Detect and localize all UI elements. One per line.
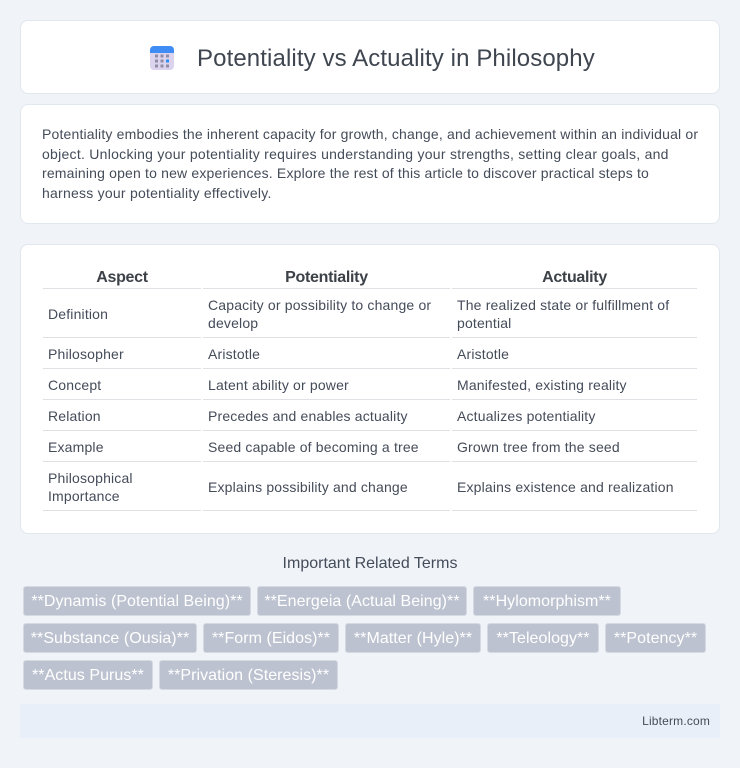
icon: calendar xyxy=(150,46,174,70)
panel: comparison table: Seed capable of becoming a tree xyxy=(208,439,419,455)
related term tags: **Form (Eidos)** xyxy=(212,630,330,647)
panel: comparison table: Grown tree from the seed xyxy=(457,439,620,455)
text block: introduction: object. Unlocking your potentiality requires understanding your strengths, setting clear goals, and xyxy=(42,146,669,162)
related term tags: **Privation (Steresis)** xyxy=(168,667,329,684)
related term tags: **Potency** xyxy=(614,630,697,647)
panel: comparison table: Precedes and enables actuality xyxy=(208,408,408,424)
row: relation: Relation xyxy=(48,408,101,424)
row: philosophical importance xyxy=(48,470,133,504)
panel: comparison table: The realized state or fulfillment of xyxy=(457,297,669,313)
row: philosophical importance: Philosophical xyxy=(48,470,133,486)
table headers: Actuality xyxy=(542,269,607,286)
panel: comparison table: Capacity or possibility to change or xyxy=(208,297,431,313)
text block: introduction xyxy=(42,126,698,201)
text block: introduction: Potentiality embodies the inherent capacity for growth, change, and achievement within an individual or xyxy=(42,126,698,142)
panel: comparison table: Aristotle xyxy=(457,346,509,362)
panel: comparison table: Aristotle xyxy=(208,346,260,362)
related term tags: **Matter (Hyle)** xyxy=(354,630,472,647)
table headers: Potentiality xyxy=(285,269,368,286)
related term tags: **Energeia (Actual Being)** xyxy=(264,593,460,610)
panel: introduction xyxy=(20,104,720,224)
related term tags: **Hylomorphism** xyxy=(483,593,611,610)
panel: comparison table: develop xyxy=(208,315,258,331)
panel: comparison table: Actualizes potentiality xyxy=(457,408,596,424)
related term tags: **Actus Purus** xyxy=(32,667,144,684)
row: concept: Concept xyxy=(48,377,101,393)
footer brand: Libterm.com xyxy=(642,714,710,728)
text block: introduction: remaining open to new experiences. Explore the rest of this article to discover practical steps to xyxy=(42,165,649,181)
table headers xyxy=(96,269,608,286)
row: philosopher: Philosopher xyxy=(48,346,124,362)
row: philosophical importance: Importance xyxy=(48,488,120,504)
panel: header xyxy=(20,20,720,94)
panel: comparison table: Explains existence and realization xyxy=(457,479,674,495)
related term tags xyxy=(23,586,706,690)
related term tags: **Substance (Ousia)** xyxy=(31,630,189,647)
footer xyxy=(20,704,720,738)
panel: comparison table xyxy=(20,244,720,534)
related term tags: **Teleology** xyxy=(496,630,590,647)
text block: introduction: harness your potentiality effectively. xyxy=(42,184,272,200)
related term tags: **Dynamis (Potential Being)** xyxy=(31,593,243,610)
panel: comparison table: Latent ability or power xyxy=(208,377,349,393)
heading: related terms: Important Related Terms xyxy=(283,555,457,572)
panel: comparison table: Explains possibility and change xyxy=(208,479,408,495)
panel: comparison table: potential xyxy=(457,315,511,331)
title: Potentiality vs Actuality in Philosophy xyxy=(197,45,595,72)
row: example: Example xyxy=(48,439,104,455)
panel: comparison table: Manifested, existing reality xyxy=(457,377,627,393)
table headers: Aspect xyxy=(96,269,148,286)
row: definition: Definition xyxy=(48,306,108,322)
